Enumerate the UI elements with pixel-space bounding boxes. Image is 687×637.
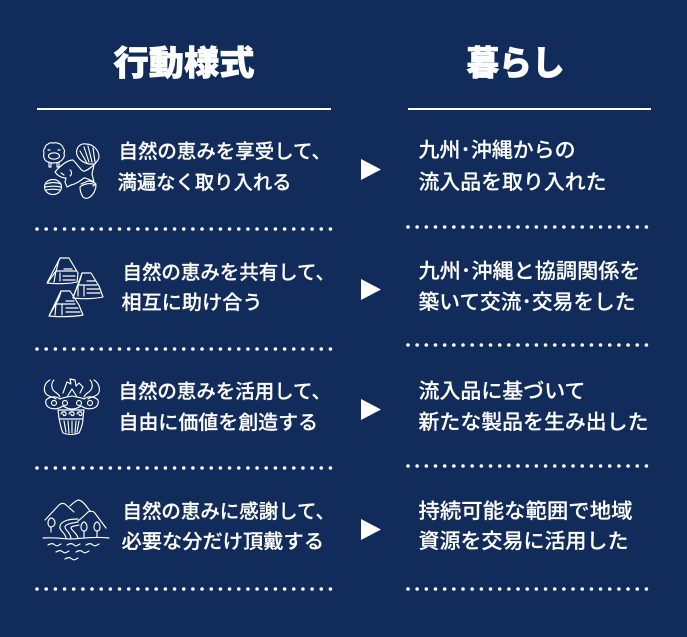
- icon: thatched houses: [47, 258, 103, 317]
- text: 流入品を取り入れた: 流入品を取り入れた: [418, 171, 606, 194]
- text: 自然の恵みを共有して、: 自然の恵みを共有して、: [122, 261, 335, 284]
- text: 築いて交流・交易をした: 築いて交流･交易をした: [418, 291, 636, 314]
- arrow 1: [361, 159, 381, 180]
- icon: mountains, river and trees: [43, 500, 109, 560]
- text: 必要な分だけ頂戴する: 必要な分だけ頂戴する: [122, 531, 324, 553]
- text: 流入品に基づいて: 流入品に基づいて: [418, 380, 586, 403]
- arrow 3: [361, 399, 381, 420]
- text: 相互に助け合う: 相互に助け合う: [122, 292, 262, 314]
- arrow 2: [361, 279, 381, 300]
- text: 自然の恵みに感謝して、: 自然の恵みに感謝して、: [122, 500, 335, 523]
- arrow 4: [361, 519, 381, 540]
- text: 九州・沖縄からの: 九州･沖縄からの: [418, 139, 576, 162]
- text: 新たな製品を生み出した: 新たな製品を生み出した: [418, 411, 648, 434]
- text: 自然の恵みを活用して、: 自然の恵みを活用して、: [118, 380, 331, 403]
- text: 自由に価値を創造する: 自由に価値を創造する: [118, 412, 318, 434]
- text: 満遍なく取り入れる: 満遍なく取り入れる: [118, 172, 292, 194]
- icon: flame-rimmed Jomon pot: [44, 379, 99, 434]
- text: 資源を交易に活用した: 資源を交易に活用した: [418, 530, 628, 553]
- heading: 行動様式: 行動様式: [114, 45, 254, 83]
- heading: 暮らし: 暮らし: [466, 45, 564, 83]
- icon: boar, shells and fish: [44, 143, 99, 198]
- text: 持続可能な範囲で地域: 持続可能な範囲で地域: [418, 500, 632, 523]
- text: 九州・沖縄と協調関係を: 九州･沖縄と協調関係を: [418, 260, 640, 283]
- text: 自然の恵みを享受して、: 自然の恵みを享受して、: [118, 140, 331, 163]
